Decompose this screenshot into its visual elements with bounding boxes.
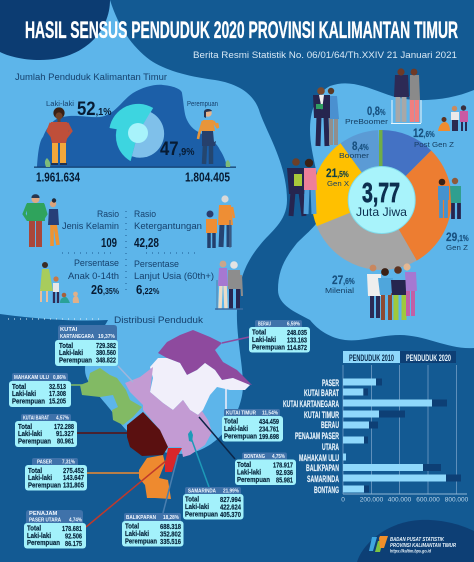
stat: male percent: 52,1% (77, 98, 112, 119)
callout: kutai timur: Total (224, 416, 238, 426)
callout: berau: 114.872 (287, 343, 307, 352)
pie centre: 3,77 (362, 177, 400, 208)
category labels: KUTAI TIMUR (304, 410, 339, 420)
icon: mother and children (40, 262, 79, 303)
callout: berau: Total (252, 328, 266, 336)
category labels: PASER (322, 378, 339, 388)
callout: bontang: 92.936 (276, 468, 293, 477)
callout: berau: 6,59% (287, 322, 300, 328)
map region: kutai timur (150, 358, 250, 415)
callout: paser: 131.805 (63, 480, 85, 490)
icon: BPS mark (369, 536, 388, 552)
callout: penajam paser utara: Laki-laki (27, 531, 51, 540)
panel: generation pie chart (287, 68, 469, 320)
callout: balikpapan: 688.318 (160, 522, 181, 531)
text: rasio jenis kelamin: Rasio (97, 209, 119, 219)
text: persentase lanjut usia: 6,22% (136, 282, 159, 297)
callout: penajam paser utara: 4,74% (69, 518, 82, 524)
text: rasio ketergantungan: Rasio (134, 209, 156, 219)
subtitle: Berita Resmi Statistik No. 06/01/64/Th.XXIV 21 Januari 2021 (193, 50, 457, 60)
callout: bontang: 178.917 (273, 460, 293, 470)
callout: kutai timur: 234.761 (259, 424, 280, 434)
label: gen x: Gen X (327, 179, 349, 188)
callout: berau: BERAU (258, 322, 271, 328)
callout: kutai kartanegara (55, 325, 118, 366)
text: rasio ketergantungan: Ketergantungan (134, 221, 202, 231)
callout: kutai kartanegara: Laki-laki (59, 348, 83, 357)
label: gen z: Gen Z (446, 243, 468, 252)
callout: kutai barat: 172.288 (54, 422, 74, 431)
callout: kutai kartanegara: KARTANEGARA (60, 334, 95, 340)
callout: paser: Perempuan (28, 480, 61, 490)
label: gen z (446, 231, 469, 252)
text: rasio ketergantungan: 42,28 (134, 235, 159, 250)
bar chart: penduduk 2010 vs 2020 (283, 351, 469, 504)
map region: kutai barat (127, 412, 168, 456)
callout: paser: 7,31% (62, 460, 75, 466)
pie centre (348, 166, 415, 234)
callout: kutai timur: KUTAI TIMUR (226, 410, 257, 416)
callout: paser (25, 458, 87, 490)
label: milenial: Milenial (325, 286, 354, 295)
map: kalimantan timur regencies (80, 330, 252, 499)
category labels (283, 378, 339, 495)
text: persentase anak: 26,35% (91, 282, 119, 297)
map region: paser (139, 455, 171, 499)
callout: kutai kartanegara: Total (59, 341, 73, 350)
callout: berau: Laki-laki (252, 335, 276, 344)
callout: penajam paser utara: PASER UTARA (29, 518, 62, 524)
axis labels: 200.000 (360, 496, 384, 504)
bars 2020 (343, 378, 461, 492)
stat: female count: 1.804.405 (185, 170, 230, 184)
callout: kutai barat: Laki-laki (18, 429, 42, 438)
text: persentase lanjut usia: Lanjut Usia (60th+) (134, 271, 214, 281)
icon: gen z couple (438, 178, 461, 219)
stat: male count: 1.961.634 (36, 170, 81, 184)
callout: samarinda: 21,99% (223, 488, 239, 494)
callout: mahakam ulu: MAHAKAM ULU (14, 375, 49, 381)
donut chart (110, 104, 164, 161)
bars 2010 (343, 378, 446, 492)
callout: balikpapan: Perempuan (125, 536, 157, 546)
callout: mahakam ulu: 32.513 (49, 382, 66, 391)
callout: kutai kartanegara: KUTAI (60, 327, 78, 333)
callout: samarinda: SAMARINDA (188, 488, 217, 494)
icon: children (438, 105, 468, 131)
callout: balikpapan: BALIKPAPAN (126, 515, 156, 521)
callout: bontang: 4,75% (272, 454, 285, 460)
callout: kutai kartanegara: Perempuan (59, 356, 92, 364)
text: persentase anak: Persentase (74, 258, 119, 268)
callout: bontang: 85.981 (276, 476, 294, 484)
label: preboomer (345, 105, 389, 126)
icon: boomer couple (313, 87, 339, 146)
map region: mahakam ulu (80, 368, 142, 425)
label: boomer: Boomer (339, 151, 370, 160)
category labels: BALIKPAPAN (306, 463, 339, 473)
icon: gen x couple (287, 158, 317, 216)
callout: penajam paser utara: 178.681 (62, 524, 83, 533)
stat: female percent: 47,9% (160, 138, 195, 159)
callout: kutai kartanegara: 348.822 (96, 356, 116, 364)
callout: kutai barat: Total (18, 422, 32, 431)
panel: ratios and percentages (24, 194, 243, 310)
category labels: MAHAKAM ULU (299, 453, 339, 463)
text: BPS name: BADAN PUSAT STATISTIK (390, 537, 445, 543)
callout: mahakam ulu: Laki-laki (12, 389, 36, 398)
callout: kutai timur: Laki-laki (224, 424, 248, 433)
callout: mahakam ulu: Total (12, 382, 26, 391)
callout: samarinda: 422.624 (220, 502, 242, 512)
callout: kutai barat: Perempuan (18, 436, 51, 446)
heading: jumlah penduduk: Jumlah Penduduk Kalimantan Timur (15, 72, 167, 82)
label: milenial: 27,6% (332, 274, 355, 287)
callout: penajam paser utara (24, 510, 86, 548)
pie centre: Juta Jiwa (356, 205, 407, 219)
axis labels: 600.000 (416, 496, 440, 504)
connector lines (71, 337, 249, 527)
legend: PENDUDUK 2010 (349, 353, 394, 364)
icon: elderly couple (215, 261, 243, 310)
label: gen x (326, 167, 349, 188)
callout: penajam paser utara: 92.506 (65, 532, 82, 540)
label: preboomer: 0,8% (367, 105, 386, 118)
axis labels: 800.000 (445, 496, 469, 504)
callout: kutai timur (222, 409, 283, 442)
divider dots (62, 211, 197, 290)
icon: milenial group (367, 263, 417, 320)
text: BPS name (390, 537, 456, 554)
callout: balikpapan: 352.802 (160, 530, 181, 538)
category labels: UTARA (322, 442, 339, 452)
callout: penajam paser utara: 86.175 (65, 539, 83, 548)
label: gen x: 21,5% (326, 167, 349, 180)
icon: woman figure (198, 109, 218, 164)
callout: berau (249, 320, 310, 352)
callout: kutai timur: 11,54% (262, 410, 278, 416)
label: boomer: 8,4% (352, 140, 369, 153)
callout: paser: Laki-laki (28, 473, 52, 482)
callout: balikpapan: Laki-laki (125, 529, 149, 538)
label: milenial (325, 274, 355, 295)
callout: berau: Perempuan (252, 342, 285, 352)
callout: penajam paser utara: Total (27, 524, 41, 532)
category labels: KUTAI BARAT (304, 388, 339, 398)
callout: samarinda (183, 487, 244, 520)
axis labels (341, 496, 469, 504)
category labels: PENAJAM PASER (295, 431, 339, 441)
callout: kutai barat: 4,57% (56, 416, 69, 422)
callout: berau: 133.163 (287, 336, 307, 344)
callout: kutai timur: 199.698 (259, 432, 279, 441)
axis labels: 400.000 (388, 496, 412, 504)
text: BPS name: PROVINSI KALIMANTAN TIMUR (390, 543, 456, 549)
callout: balikpapan: 335.516 (160, 537, 181, 546)
callout: balikpapan: 18,28% (163, 515, 179, 521)
text: rasio jenis kelamin: Jenis Kelamin (62, 221, 119, 231)
callout: samarinda: Perempuan (185, 510, 218, 518)
callout: bontang: Perempuan (237, 475, 270, 484)
callout: kutai kartanegara: 729.382 (96, 341, 116, 350)
callout: penajam paser utara: PENAJAM (29, 511, 58, 517)
icon: grandfather and child (206, 195, 234, 248)
text: persentase lanjut usia (134, 259, 214, 297)
panel: total population by sex (15, 72, 236, 184)
callout: kutai kartanegara: 19,37% (98, 334, 115, 340)
label: gen z: 29,1% (446, 231, 469, 244)
text: rasio jenis kelamin: 109 (101, 235, 117, 250)
callout: samarinda: 827.994 (220, 495, 242, 504)
callout: samarinda: 405.370 (220, 510, 241, 519)
callout: kutai timur: Perempuan (224, 432, 257, 440)
map region: samarinda (188, 430, 193, 442)
map region: kutai kartanegara (125, 367, 212, 457)
legend (343, 351, 456, 364)
category labels: BONTANG (314, 485, 339, 495)
callout: paser: Total (28, 466, 42, 475)
callout: kutai barat: 91.327 (56, 429, 74, 438)
map region: penajam paser utara (165, 448, 182, 472)
callout: kutai barat (15, 414, 77, 447)
text: persentase anak (68, 258, 119, 297)
heading: distribusi penduduk: Distribusi Penduduk (114, 315, 203, 326)
callout: kutai timur: 434.459 (259, 417, 279, 426)
callout: balikpapan (122, 513, 184, 546)
text: persentase lanjut usia: Persentase (134, 259, 179, 269)
callout: penajam paser utara: Perempuan (27, 538, 60, 547)
label: post gen z (413, 127, 454, 149)
icon: couple (24, 194, 59, 247)
icon: man figure (48, 107, 71, 164)
callout: kutai barat: 80.961 (57, 436, 75, 446)
text: BPS name: https://kaltim.bps.go.id (390, 548, 431, 554)
map region: berau (158, 330, 252, 385)
callout: paser: 143.647 (63, 473, 84, 482)
callout: mahakam ulu: Perempuan (12, 396, 45, 406)
pie slices (312, 130, 452, 270)
icon: preboomer couple (391, 68, 421, 124)
category labels: KUTAI KARTANEGARA (283, 399, 339, 409)
text: persentase anak: Anak 0-14th (68, 271, 119, 281)
callout: mahakam ulu (9, 373, 71, 407)
label: boomer (339, 140, 370, 160)
label: perempuan: Perempuan (187, 99, 218, 108)
callout: bontang: Total (237, 460, 251, 469)
text: rasio ketergantungan (134, 209, 202, 250)
category labels: BERAU (321, 420, 339, 430)
category labels: SAMARINDA (307, 474, 339, 484)
logo: BPS (369, 536, 456, 554)
callout: paser: PASER (37, 460, 53, 466)
callout: bontang (235, 452, 296, 485)
callout: samarinda: Laki-laki (185, 502, 209, 511)
callout: samarinda: Total (185, 494, 199, 504)
callout: kutai kartanegara: 380.560 (96, 348, 116, 357)
callout: balikpapan: Total (125, 522, 139, 530)
text: rasio jenis kelamin (62, 209, 119, 250)
callout: kutai barat: KUTAI BARAT (23, 416, 49, 422)
callout: berau: 248.035 (287, 328, 308, 337)
label: laki-laki: Laki-laki (46, 99, 74, 108)
ground line (34, 166, 236, 168)
callout: paser: 275.452 (63, 466, 84, 475)
label: preboomer: PreBoomer (345, 117, 389, 126)
icon: plants (45, 158, 230, 167)
callout: bontang: BONTANG (244, 454, 265, 460)
hill background (37, 85, 227, 167)
callout: mahakam ulu: 17.308 (49, 389, 66, 398)
callout: bontang: Laki-laki (237, 468, 261, 476)
callout: mahakam ulu: 0,86% (53, 375, 66, 381)
label: post gen z: Post Gen Z (414, 140, 454, 149)
label: post gen z: 12,6% (413, 127, 435, 140)
callout: mahakam ulu: 15.205 (49, 396, 67, 406)
axis labels: 0 (341, 496, 345, 504)
